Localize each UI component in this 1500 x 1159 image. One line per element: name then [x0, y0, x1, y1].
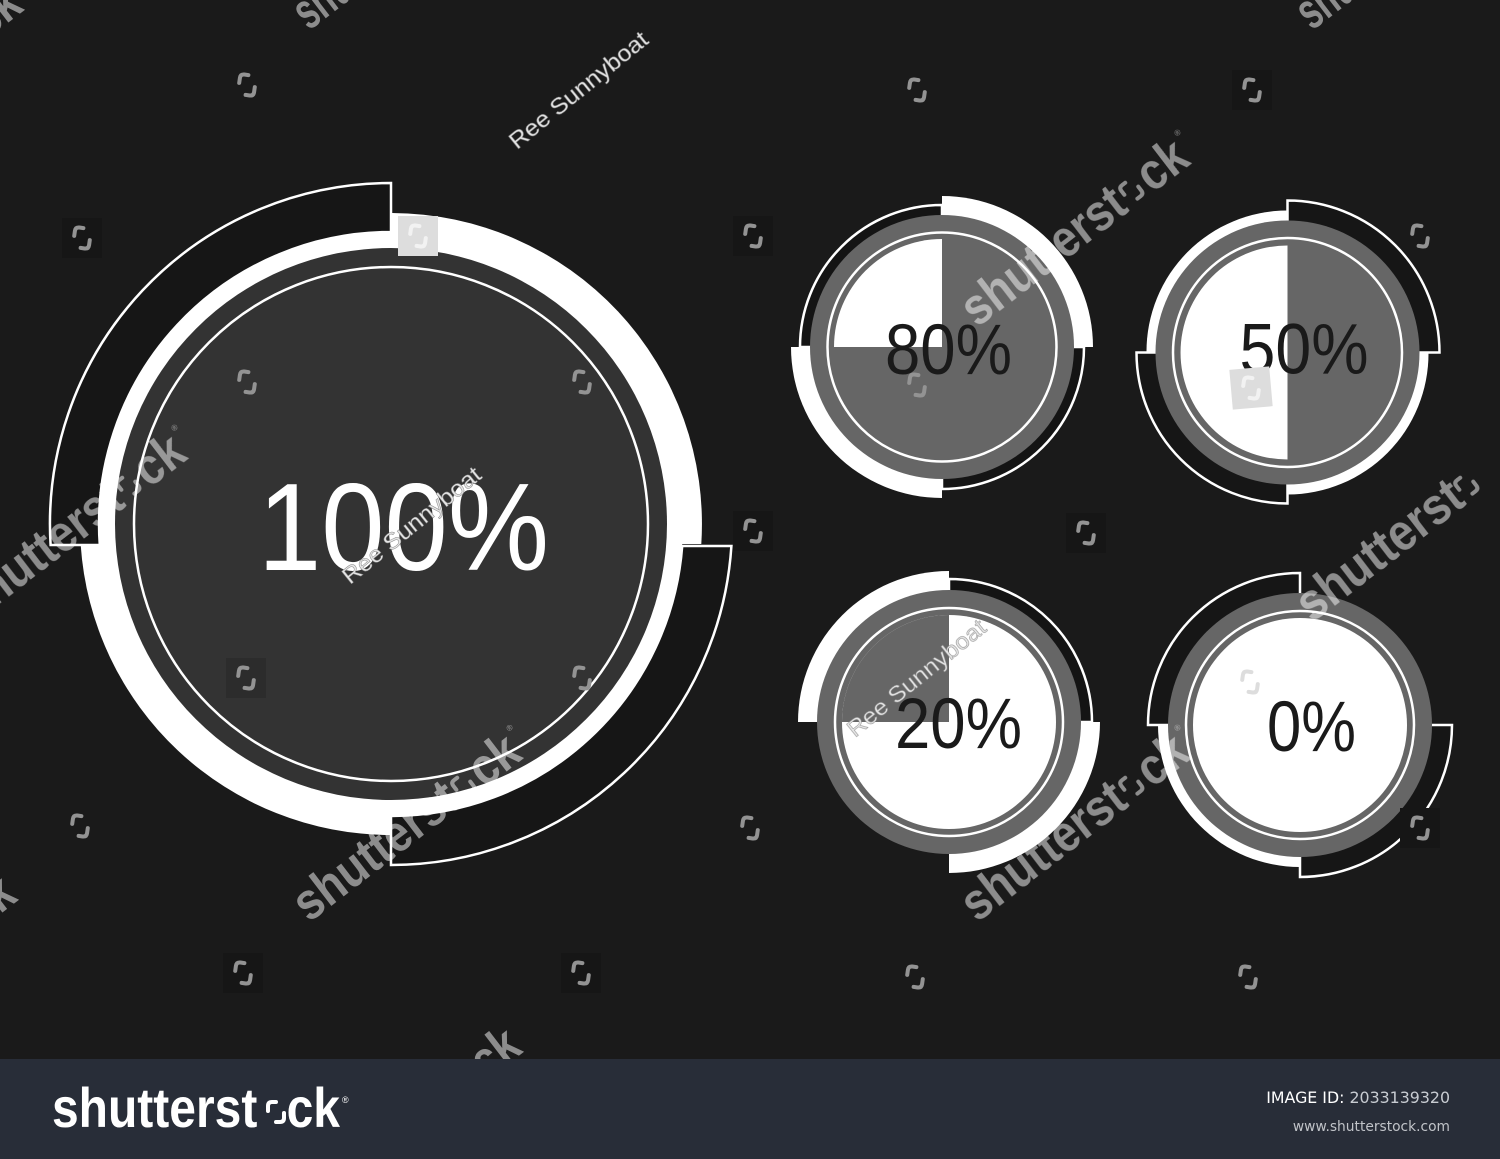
value: 50%: 50% [1240, 310, 1368, 390]
value: 20%: 20% [895, 685, 1022, 764]
watermark: diagonal shutterstock text: ® [1173, 128, 1183, 138]
white half slice [1181, 246, 1288, 460]
outlined arc: bottom right [1300, 725, 1452, 877]
grey quarter slice [842, 615, 949, 722]
white disc [1193, 618, 1407, 832]
solid arc: bottom left [1158, 725, 1300, 867]
watermark: diagonal shutterstock text: shutterstock [949, 721, 1199, 933]
outlined arc: bottom left [1136, 352, 1288, 504]
thick arc: top left [798, 571, 949, 722]
grey ring [810, 215, 1074, 479]
solid arc: top left [1146, 210, 1288, 352]
watermark: contributor name: Ree Sunnyboat [842, 614, 992, 742]
thick arc: bottom right [949, 722, 1100, 873]
thick arc: bottom left [81, 545, 391, 835]
thick arc: top right [942, 196, 1093, 347]
outlined arc: top left [1148, 573, 1300, 725]
grey ring [1168, 593, 1432, 857]
outlined arc: top right [1288, 200, 1440, 352]
website: www.shutterstock.com [1293, 1119, 1450, 1135]
value: 80%: 80% [885, 311, 1012, 390]
watermark: diagonal shutterstock text: ck [458, 1015, 531, 1091]
value: 100%: 100% [258, 459, 549, 597]
white quarter slice [834, 239, 942, 347]
dark disc [115, 248, 667, 800]
outlined arc: top left [50, 183, 391, 545]
watermark: contributor name: Ree Sunnyboat [337, 461, 487, 589]
solid arc: bottom right [1288, 352, 1429, 494]
chart: 20% donut [798, 571, 1100, 873]
watermark: diagonal shutterstock text: shutterstock [949, 126, 1199, 338]
chart: 100% large donut [50, 183, 731, 865]
thick arc: bottom left [791, 347, 942, 498]
chart: 50% donut [1136, 200, 1440, 504]
chart: 80% donut [791, 196, 1093, 498]
footer logo: ® [342, 1095, 349, 1105]
value: 0%: 0% [1267, 688, 1356, 767]
grey ring [817, 590, 1081, 854]
thin inner ring [1173, 238, 1402, 467]
watermark: diagonal shutterstock text: shutterstock [281, 721, 531, 933]
outlined arc: bottom right [942, 347, 1084, 489]
thin inner ring [1186, 611, 1414, 839]
watermark: diagonal shutterstock text: ® [170, 423, 180, 433]
footer bar [0, 1059, 1500, 1159]
watermark: diagonal shutterstock text: ® [505, 723, 515, 733]
grey ring [1156, 220, 1420, 484]
thin inner ring [835, 608, 1063, 836]
outlined arc: bottom right [391, 546, 731, 865]
outlined arc: top right [949, 579, 1092, 722]
watermark: bracket icons [62, 70, 1440, 993]
footer logo: shutterstock [52, 1076, 341, 1139]
watermark: contributor name: Ree Sunnyboat [504, 26, 654, 154]
watermark: contributor name [337, 26, 992, 742]
white ring [99, 232, 683, 816]
thin inner ring [134, 267, 648, 781]
watermark: diagonal shutterstock text: ® [1173, 723, 1183, 733]
thin inner ring [828, 232, 1056, 462]
image id: IMAGE ID: 2033139320 [1266, 1088, 1450, 1107]
white disc [842, 615, 1056, 829]
thick arc: top right [391, 213, 702, 544]
chart: 0% donut [1148, 573, 1452, 877]
outlined arc: top left [800, 205, 942, 347]
watermark: diagonal shutterstock text: shutterst [1284, 467, 1475, 633]
